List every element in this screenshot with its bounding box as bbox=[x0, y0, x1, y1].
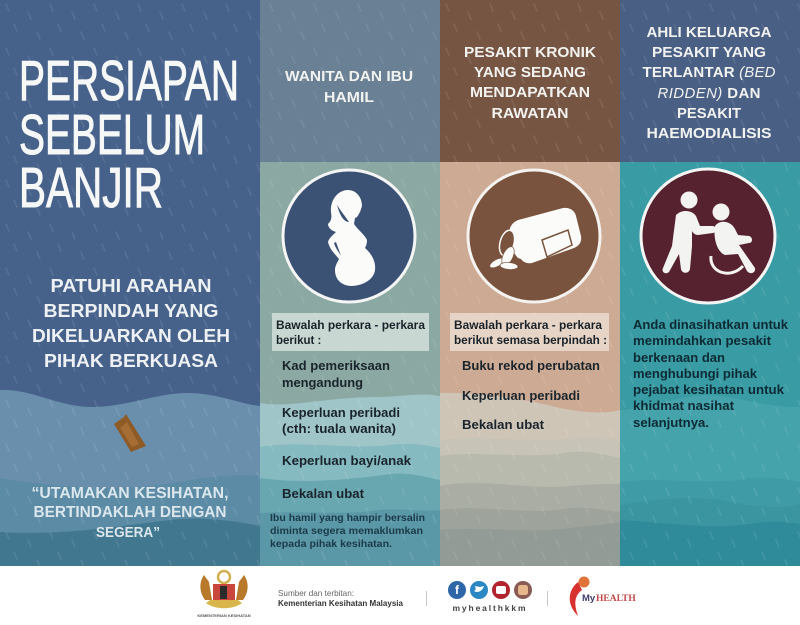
text block: note: Ibu hamil yang hampir bersalin bbox=[270, 512, 425, 524]
callout: list heading bbox=[272, 313, 429, 351]
text block: advice: memindahkan pesakit bbox=[633, 333, 772, 348]
text block: items: (cth: tuala wanita) bbox=[282, 421, 396, 436]
text block: items bbox=[462, 358, 600, 432]
icon: pregnant woman bbox=[283, 170, 415, 302]
icon: spilled pill bottle bbox=[468, 170, 600, 302]
callout: list heading: berikut semasa berpindah : bbox=[454, 335, 607, 347]
text block: advice bbox=[633, 317, 789, 430]
text block: items: Bekalan ubat bbox=[462, 417, 545, 432]
text block: items: Keperluan peribadi bbox=[462, 388, 580, 403]
quote: “UTAMAKAN KESIHATAN, bbox=[32, 485, 228, 502]
text block: items: Buku rekod perubatan bbox=[462, 358, 600, 373]
icon: MyHealth logo: HEALTH bbox=[596, 594, 636, 604]
instruction text bbox=[32, 276, 230, 371]
column header: MENDAPATKAN bbox=[470, 84, 590, 101]
text block: note: diminta segera memaklumkan bbox=[270, 525, 423, 537]
text block: advice: Anda dinasihatkan untuk bbox=[633, 317, 789, 332]
text block: source: Kementerian Kesihatan Malaysia bbox=[278, 598, 403, 608]
icon: carer pushing wheelchair bbox=[641, 169, 775, 303]
column header: PESAKIT KRONIK bbox=[464, 44, 596, 61]
panel: left column bbox=[0, 0, 260, 566]
text block: items: Bekalan ubat bbox=[282, 486, 365, 501]
instruction text: DIKELUARKAN OLEH bbox=[32, 326, 230, 346]
icon: coat of arms: KEMENTERIAN KESIHATAN bbox=[197, 613, 251, 618]
text block: advice: menghubungi pihak bbox=[633, 366, 758, 381]
text block: source: Sumber dan terbitan: bbox=[278, 588, 354, 598]
column header: WANITA DAN IBU bbox=[285, 68, 413, 85]
text block: advice: berkenaan dan bbox=[633, 350, 725, 365]
text block: source bbox=[278, 588, 403, 608]
column header: PESAKIT bbox=[677, 105, 741, 122]
callout: list heading bbox=[450, 313, 609, 351]
column header: RIDDEN) DAN bbox=[658, 85, 760, 102]
text block: note bbox=[270, 512, 425, 550]
column header: HAMIL bbox=[324, 89, 374, 106]
panel: chronic patients bbox=[440, 0, 620, 566]
instruction text: PIHAK BERKUASA bbox=[44, 351, 218, 371]
icon: social media: f bbox=[455, 583, 460, 597]
column header bbox=[260, 0, 440, 162]
text block: advice: pejabat kesihatan untuk bbox=[633, 382, 785, 397]
column header: PESAKIT YANG bbox=[652, 44, 766, 61]
callout: list heading: Bawalah perkara - perkara bbox=[276, 320, 426, 332]
icon: coat of arms bbox=[197, 571, 251, 618]
footer bbox=[0, 566, 800, 625]
title: PERSIAPAN bbox=[19, 49, 239, 113]
callout: list heading: berikut : bbox=[276, 335, 321, 347]
icon: MyHealth logo bbox=[570, 576, 636, 616]
column header bbox=[440, 0, 620, 162]
instruction text: BERPINDAH YANG bbox=[44, 301, 218, 321]
quote bbox=[32, 485, 228, 541]
text block: note: kepada pihak kesihatan. bbox=[270, 538, 392, 550]
text block: advice: selanjutnya. bbox=[633, 415, 709, 430]
text block: items: Keperluan peribadi bbox=[282, 405, 400, 420]
icon: social media bbox=[448, 581, 532, 613]
title: BANJIR bbox=[19, 156, 163, 220]
callout: list heading: Bawalah perkara - perkara bbox=[454, 320, 603, 332]
title: SEBELUM bbox=[19, 103, 205, 167]
text block: items: mengandung bbox=[282, 375, 363, 390]
icon: floating wooden debris bbox=[114, 414, 146, 452]
icon: MyHealth logo: My bbox=[582, 593, 596, 604]
column header bbox=[620, 0, 800, 162]
column header: TERLANTAR (BED bbox=[642, 64, 776, 81]
column header: RAWATAN bbox=[492, 105, 568, 122]
text block: items: Keperluan bayi/anak bbox=[282, 453, 412, 468]
text block: items bbox=[282, 358, 412, 501]
text block: items: Kad pemeriksaan bbox=[282, 358, 390, 373]
text block: advice: khidmat nasihat bbox=[633, 398, 735, 413]
title bbox=[19, 49, 239, 220]
panel: bedridden and haemodialysis bbox=[620, 0, 800, 566]
instruction text: PATUHI ARAHAN bbox=[50, 276, 212, 296]
icon: social media: myhealthkkm bbox=[452, 603, 526, 613]
column header: AHLI KELUARGA bbox=[646, 24, 772, 41]
column header: HAEMODIALISIS bbox=[646, 125, 772, 142]
quote: BERTINDAKLAH DENGAN bbox=[34, 504, 226, 521]
panel: pregnant women bbox=[260, 0, 440, 566]
quote: SEGERA” bbox=[96, 524, 160, 541]
column header: YANG SEDANG bbox=[474, 64, 586, 81]
